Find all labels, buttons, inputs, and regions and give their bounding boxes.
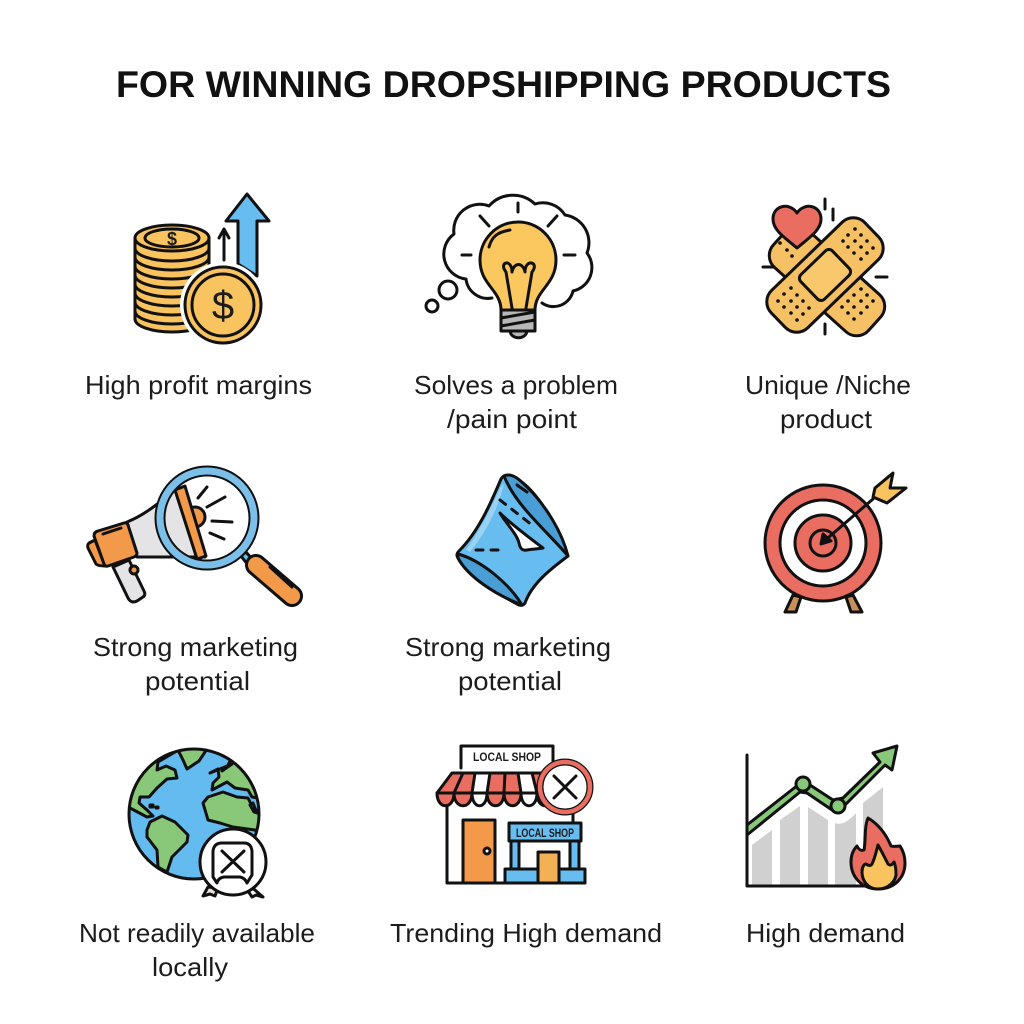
label: Strong marketing <box>405 632 611 662</box>
panel: high demand <box>746 746 905 948</box>
label: potential <box>145 666 250 696</box>
label: Strong marketing <box>93 632 298 662</box>
icon: coins and up arrow: $ <box>167 229 177 249</box>
label <box>79 918 315 982</box>
panel: high profit margins <box>85 194 312 400</box>
label: potential <box>458 666 562 696</box>
icon: coins and up arrow: $ <box>212 284 234 328</box>
label: High demand <box>746 918 905 948</box>
label: locally <box>152 952 228 982</box>
icon: rising chart with flame <box>747 746 905 889</box>
icon: local shop with cross: LOCAL SHOP <box>516 826 574 840</box>
title: FOR WINNING DROPSHIPPING PRODUCTS <box>116 64 891 105</box>
label <box>405 632 611 696</box>
label: /pain point <box>447 404 578 434</box>
label <box>93 632 298 696</box>
label: Unique /Niche <box>745 370 911 400</box>
label <box>745 370 911 434</box>
label: Trending High demand <box>390 918 662 948</box>
panel: strong marketing potential <box>88 471 298 696</box>
icon: local shop with cross <box>437 746 590 883</box>
icon: local shop with cross: LOCAL SHOP <box>473 750 541 764</box>
label: Not readily available <box>79 918 315 948</box>
panel: trending high demand <box>390 746 662 948</box>
label: High profit margins <box>85 370 312 400</box>
icon: megaphone under magnifier <box>88 471 292 602</box>
label: product <box>780 404 873 434</box>
icon: bullseye with arrow <box>765 473 906 612</box>
icon: blue sleeve <box>457 475 568 605</box>
panel: unique niche product <box>745 199 911 434</box>
icon: thought cloud with light bulb <box>426 195 592 338</box>
label: Solves a problem <box>414 370 618 400</box>
icon: coins and up arrow <box>135 194 269 348</box>
icon: crossed bandages with heart <box>760 199 891 342</box>
panel: target <box>765 473 906 612</box>
icon: globe with badge <box>128 748 268 898</box>
panel: not readily available locally <box>79 740 315 982</box>
panel: blue product <box>405 475 611 696</box>
panel: solves a problem <box>414 195 618 434</box>
label <box>414 370 618 434</box>
